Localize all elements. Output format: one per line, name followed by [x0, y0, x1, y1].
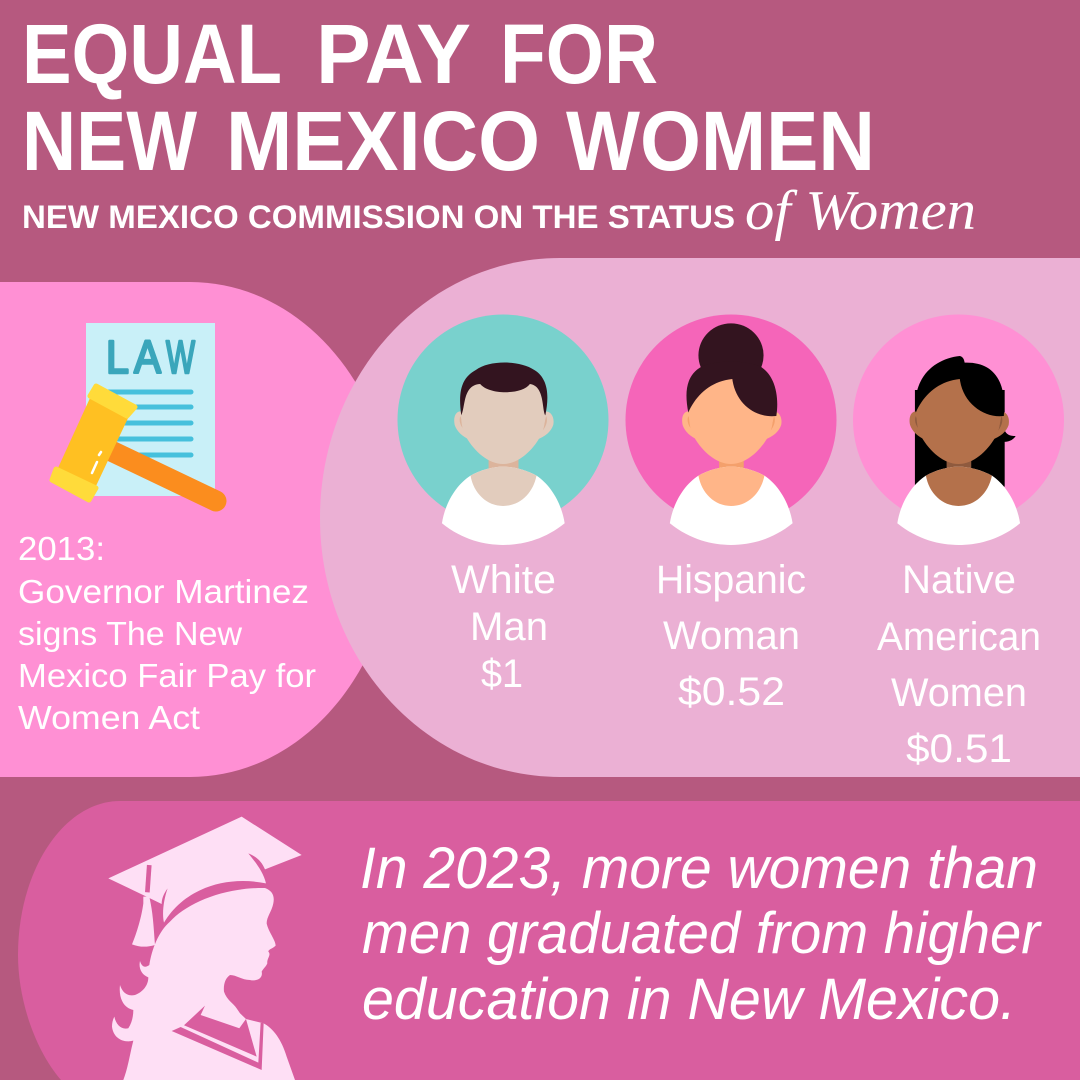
label: white man $1: White	[451, 558, 556, 602]
label: white man $1: $1	[481, 652, 523, 696]
icon: graduate silhouette	[108, 817, 302, 1080]
panel: pay comparison	[320, 258, 1080, 777]
text: graduation statement: In 2023, more women than	[360, 836, 1038, 901]
label: native american women $0.51: American	[877, 615, 1041, 659]
label: native american women $0.51: Native	[902, 558, 1016, 602]
subtitle: organisation name: NEW MEXICO COMMISSION ON THE STATUS	[22, 199, 735, 235]
icon: law document and gavel: A	[134, 331, 161, 383]
label: hispanic woman $0.52: Woman	[663, 614, 800, 658]
label: hispanic woman $0.52	[656, 558, 806, 714]
label: hispanic woman $0.52: $0.52	[678, 670, 785, 714]
icon: law document and gavel	[52, 323, 216, 501]
label: hispanic woman $0.52: Hispanic	[656, 558, 806, 602]
subtitle: organisation name	[22, 180, 976, 242]
portrait: white man	[398, 314, 608, 545]
title: MEXICO	[226, 94, 540, 188]
label: white man $1: Man	[470, 605, 548, 649]
title: NEW	[22, 94, 198, 188]
label: native american women $0.51: $0.51	[906, 727, 1012, 771]
title: FOR	[500, 7, 658, 101]
text: 2013 law description: Women Act	[18, 699, 200, 736]
text: graduation statement: education in New Mexico.	[362, 967, 1016, 1032]
portrait: hispanic woman	[626, 314, 836, 545]
title	[22, 7, 875, 188]
icon: law document and gavel: W	[166, 331, 195, 383]
panel: higher education	[18, 801, 1080, 1080]
title: EQUAL	[22, 7, 282, 101]
label: native american women $0.51	[877, 558, 1041, 771]
text: 2013 law description: signs The New	[18, 615, 242, 652]
label: native american women $0.51: Women	[891, 671, 1027, 715]
panel: 2013 law	[0, 282, 396, 777]
icon: law document and gavel: L	[106, 331, 129, 383]
text: graduation statement	[360, 836, 1043, 1032]
text: 2013 law description: 2013:	[18, 530, 105, 567]
text: 2013 law description: Mexico Fair Pay for	[18, 657, 316, 694]
title: PAY	[316, 7, 471, 101]
subtitle: organisation name: of Women	[745, 180, 976, 242]
portrait: native american woman	[853, 314, 1064, 545]
title: WOMEN	[566, 94, 875, 188]
text: 2013 law description	[18, 530, 316, 736]
label: white man $1	[451, 558, 556, 696]
text: graduation statement: men graduated from higher	[362, 901, 1043, 966]
text: 2013 law description: Governor Martinez	[18, 573, 309, 610]
